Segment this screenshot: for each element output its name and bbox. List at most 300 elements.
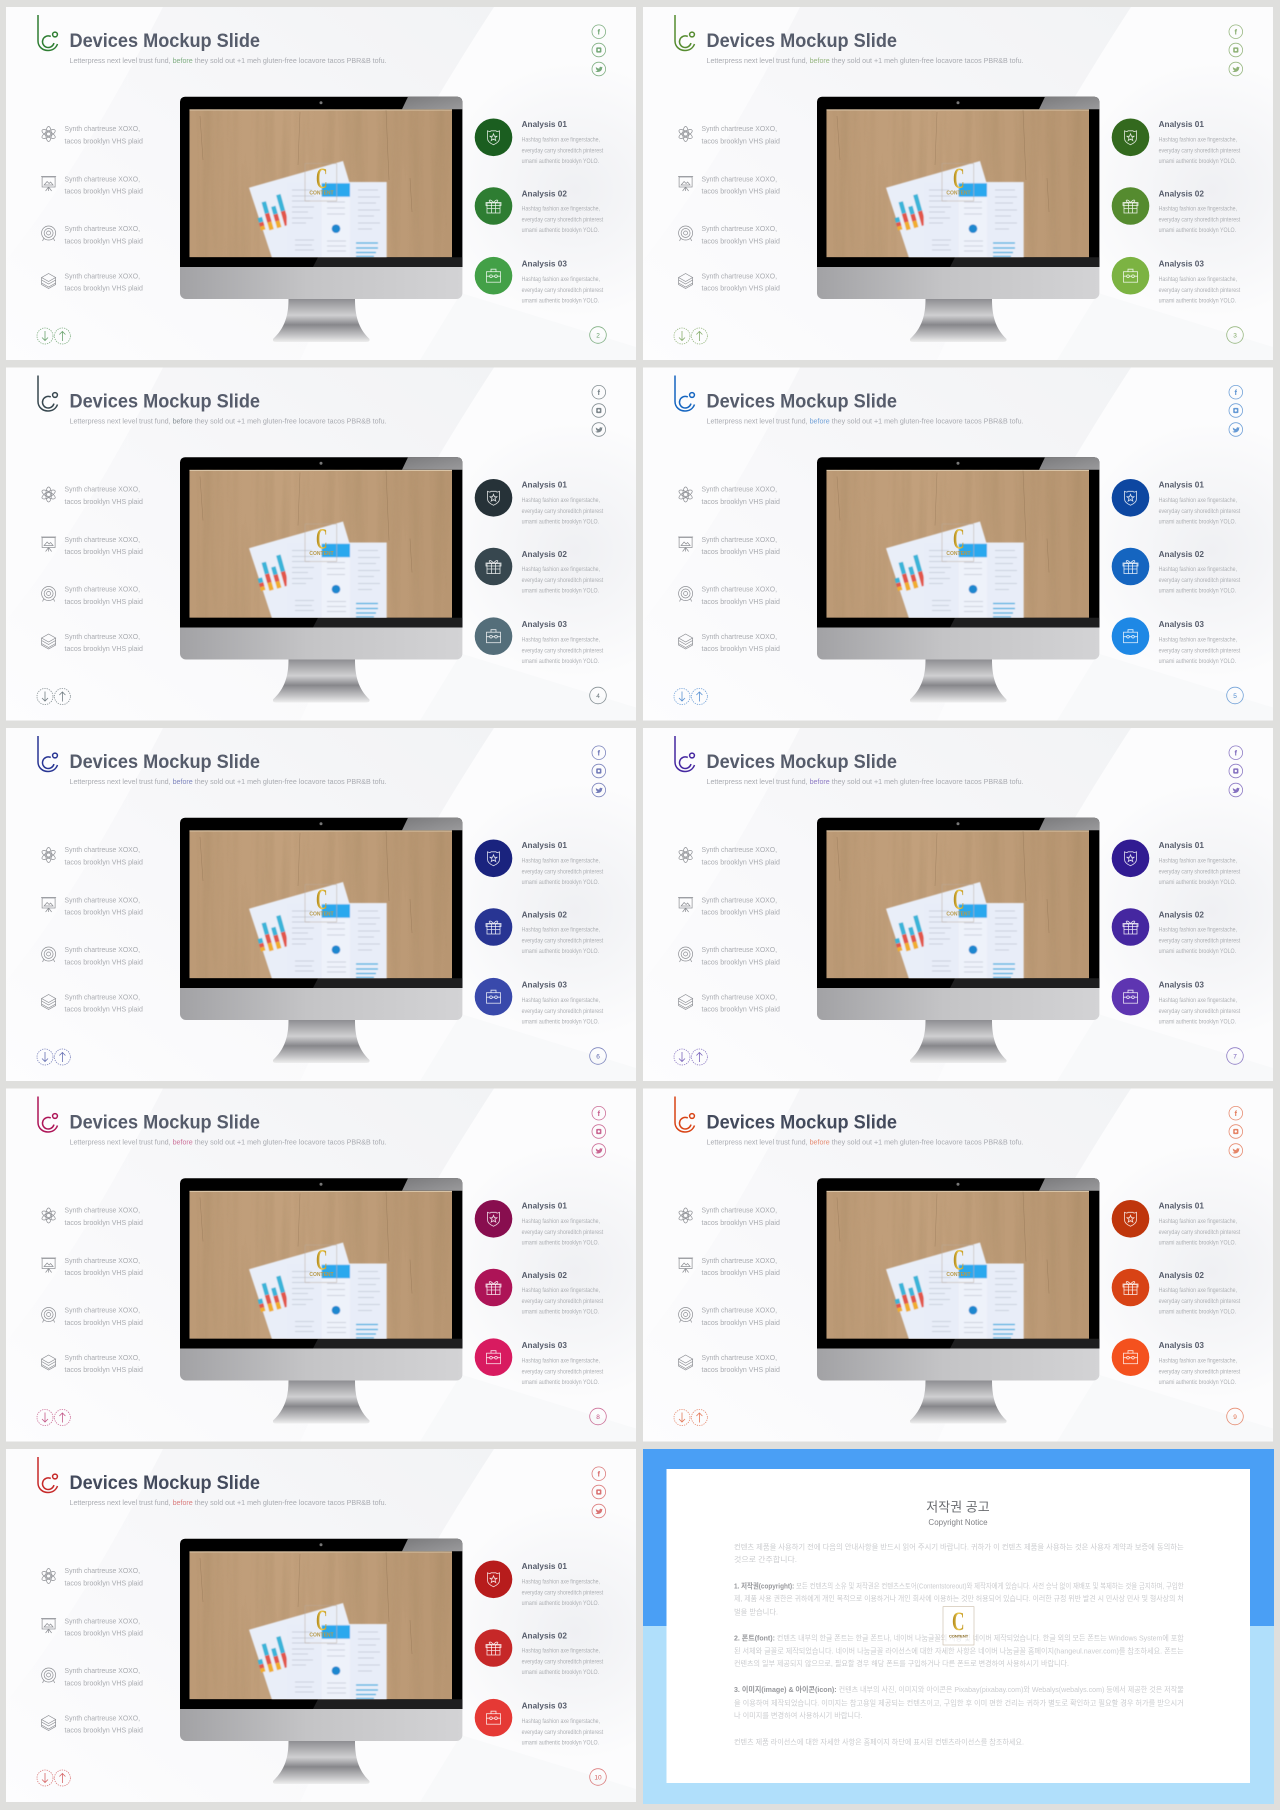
- feature list: tacos brooklyn VHS plaid: [64, 644, 143, 653]
- analysis 01: Hashtag fashion axe fingerstache,: [1159, 498, 1237, 504]
- slide 2: [6, 7, 710, 360]
- analysis 02: [475, 1629, 603, 1676]
- slide background: [6, 1088, 710, 1442]
- slide background: [643, 7, 1280, 360]
- slide 10: [6, 1449, 710, 1802]
- analysis 03: everyday carry shoreditch pinterest: [1159, 649, 1240, 655]
- title: Devices Mockup Slide: [70, 1473, 260, 1494]
- page number: [1227, 1408, 1243, 1425]
- analysis 03: umami authentic brooklyn YOLO.: [1159, 659, 1236, 665]
- feature list: Synth chartreuse XOXO,: [64, 224, 140, 233]
- monitor mockup: [817, 818, 1099, 1063]
- feature list: Synth chartreuse XOXO,: [64, 632, 140, 641]
- slide 9: [643, 1088, 1280, 1442]
- title: Devices Mockup Slide: [70, 31, 260, 52]
- analysis 02: umami authentic brooklyn YOLO.: [522, 949, 599, 955]
- feature list: Synth chartreuse XOXO,: [702, 992, 777, 1001]
- analysis 01: [1112, 118, 1240, 165]
- monitor mockup: [180, 1178, 462, 1424]
- analysis 02: umami authentic brooklyn YOLO.: [1159, 589, 1236, 595]
- title: Devices Mockup Slide: [70, 392, 260, 412]
- analysis 02: umami authentic brooklyn YOLO.: [522, 1670, 599, 1676]
- page number: 3: [1233, 332, 1237, 339]
- social icons: f: [1235, 748, 1238, 757]
- notice body text: 3. 이미지(image) & 아이콘(icon): 컨텐츠 내부의 사진, 이미지와 아이콘은 Pixabay(pixabay.com)와 Webalys(webalys.com) 등에서 제공한 것은 저작물: [734, 1685, 1184, 1694]
- subtitle: Letterpress next level trust fund, before they sold out +1 meh gluten-free locavore tacos PBR&B tofu.: [70, 777, 387, 786]
- social icons: f: [598, 1109, 601, 1118]
- analysis 03: Hashtag fashion axe fingerstache,: [522, 1719, 600, 1725]
- analysis 03: Analysis 03: [1159, 259, 1204, 269]
- analysis 01: everyday carry shoreditch pinterest: [1159, 869, 1240, 875]
- analysis 03: everyday carry shoreditch pinterest: [522, 288, 603, 294]
- feature list: [678, 1206, 780, 1374]
- analysis 02: Analysis 02: [522, 1270, 567, 1280]
- page number: 9: [1233, 1414, 1237, 1421]
- feature list: tacos brooklyn VHS plaid: [64, 1629, 143, 1638]
- analysis 01: everyday carry shoreditch pinterest: [522, 1590, 603, 1596]
- navigation arrows: [674, 1049, 707, 1065]
- analysis 03: Hashtag fashion axe fingerstache,: [1159, 998, 1237, 1004]
- feature list: tacos brooklyn VHS plaid: [702, 236, 780, 245]
- feature list: [678, 845, 780, 1014]
- analysis 02: [475, 548, 603, 595]
- feature list: Synth chartreuse XOXO,: [64, 174, 140, 183]
- notice body text: 것으로 간주합니다.: [734, 1555, 797, 1564]
- analysis 01: Analysis 01: [1159, 840, 1204, 850]
- logo: [38, 1096, 58, 1132]
- feature list: Synth chartreuse XOXO,: [64, 535, 140, 544]
- analysis 02: everyday carry shoreditch pinterest: [522, 218, 603, 224]
- analysis 01: [1112, 1200, 1240, 1246]
- feature list: Synth chartreuse XOXO,: [64, 1566, 140, 1575]
- analysis 01: [475, 1560, 603, 1607]
- feature list: [678, 484, 780, 653]
- analysis 02: [1112, 548, 1240, 595]
- analysis 02: [475, 187, 603, 234]
- slide background: [6, 728, 710, 1081]
- notice body text: 을 이용하여 제작되었습니다. 이미지는 참고용일 제공되는 컨텐츠이고, 구입한 후 이미 편한 건리는 귀하가 별도로 확인하고 필요할 경우 허가를 받으시거: [734, 1698, 1184, 1708]
- analysis 03: umami authentic brooklyn YOLO.: [1159, 1380, 1236, 1386]
- analysis 01: [475, 1200, 603, 1246]
- feature list: Synth chartreuse XOXO,: [702, 584, 777, 594]
- social icons: [1229, 746, 1243, 797]
- analysis 03: Analysis 03: [1159, 1340, 1204, 1350]
- notice body text: 벌을 받습니다.: [734, 1608, 778, 1616]
- analysis 01: Analysis 01: [1159, 1200, 1204, 1210]
- notice body text: [734, 1542, 1184, 1746]
- analysis 02: Hashtag fashion axe fingerstache,: [1159, 207, 1237, 213]
- analysis 03: umami authentic brooklyn YOLO.: [522, 1380, 599, 1386]
- feature list: Synth chartreuse XOXO,: [64, 1713, 140, 1722]
- feature list: tacos brooklyn VHS plaid: [64, 497, 143, 506]
- analysis 02: umami authentic brooklyn YOLO.: [1159, 949, 1236, 955]
- analysis 01: [475, 840, 603, 886]
- analysis 03: Analysis 03: [522, 1340, 567, 1350]
- notice body text: 2. 폰트(font): 컨텐츠 내부의 한글 폰트는 한글 폰트나, 네이버 나눔글꼴의 사용 및 네이버 제작되었습니다. 한글 외의 모든 폰트는 Windows System에 포함: [734, 1634, 1184, 1642]
- analysis 01: umami authentic brooklyn YOLO.: [1159, 519, 1236, 525]
- notice body text: 컨텐츠 제품을 사용하기 전에 다음의 안내사항을 반드시 읽어 주시기 바랍니다. 귀하가 이 컨텐츠 제품을 사용하는 것은 사용자 계약과 보증에 동의하는: [734, 1542, 1184, 1551]
- slide 6: [6, 728, 710, 1081]
- title: Devices Mockup Slide: [706, 752, 897, 773]
- feature list: Synth chartreuse XOXO,: [702, 1306, 777, 1314]
- subtitle: Letterpress next level trust fund, before they sold out +1 meh gluten-free locavore tacos PBR&B tofu.: [70, 417, 387, 426]
- feature list: Synth chartreuse XOXO,: [64, 945, 140, 954]
- analysis 01: everyday carry shoreditch pinterest: [522, 509, 603, 515]
- feature list: tacos brooklyn VHS plaid: [64, 908, 143, 917]
- page number: 8: [596, 1414, 600, 1421]
- feature list: tacos brooklyn VHS plaid: [702, 1365, 780, 1374]
- analysis 02: Hashtag fashion axe fingerstache,: [1159, 567, 1237, 573]
- analysis 02: umami authentic brooklyn YOLO.: [522, 228, 599, 234]
- analysis 03: Hashtag fashion axe fingerstache,: [522, 277, 600, 283]
- analysis 03: everyday carry shoreditch pinterest: [522, 1730, 603, 1736]
- title: Devices Mockup Slide: [70, 752, 260, 773]
- white card: [666, 1469, 1250, 1783]
- feature list: tacos brooklyn VHS plaid: [702, 136, 780, 145]
- analysis 03: umami authentic brooklyn YOLO.: [522, 659, 599, 665]
- analysis 03: [475, 617, 603, 665]
- page number: [590, 327, 606, 343]
- feature list: tacos brooklyn VHS plaid: [702, 497, 780, 506]
- analysis 01: Analysis 01: [522, 119, 567, 129]
- analysis 03: Hashtag fashion axe fingerstache,: [1159, 638, 1237, 644]
- feature list: Synth chartreuse XOXO,: [702, 1206, 777, 1214]
- feature list: [41, 124, 143, 293]
- analysis 02: umami authentic brooklyn YOLO.: [522, 589, 599, 595]
- analysis 02: Hashtag fashion axe fingerstache,: [522, 207, 600, 213]
- analysis 03: [1112, 1338, 1240, 1386]
- analysis 03: Analysis 03: [522, 619, 567, 629]
- analysis 01: umami authentic brooklyn YOLO.: [1159, 159, 1236, 165]
- feature list: Synth chartreuse XOXO,: [64, 1666, 140, 1675]
- analysis 01: umami authentic brooklyn YOLO.: [522, 159, 599, 165]
- feature list: Synth chartreuse XOXO,: [702, 632, 777, 641]
- navigation arrows: [37, 1770, 70, 1786]
- watermark logo: CONTENT: [949, 1634, 969, 1638]
- analysis 02: [1112, 1269, 1240, 1316]
- analysis 01: [1112, 840, 1240, 886]
- analysis 01: [1112, 479, 1240, 525]
- feature list: tacos brooklyn VHS plaid: [64, 1268, 143, 1277]
- social icons: [592, 746, 606, 797]
- social icons: f: [1235, 27, 1238, 36]
- monitor mockup: [817, 457, 1099, 702]
- feature list: [41, 845, 143, 1014]
- feature list: Synth chartreuse XOXO,: [64, 124, 140, 133]
- page number: 7: [1233, 1053, 1237, 1060]
- feature list: Synth chartreuse XOXO,: [64, 1616, 140, 1625]
- watermark logo: C: [952, 1607, 964, 1636]
- analysis 01: [475, 479, 603, 525]
- analysis 03: umami authentic brooklyn YOLO.: [522, 1740, 599, 1746]
- title: Devices Mockup Slide: [706, 1112, 897, 1134]
- slide 5: [643, 368, 1280, 720]
- logo: [675, 736, 694, 772]
- monitor mockup: [180, 457, 462, 702]
- analysis 03: Hashtag fashion axe fingerstache,: [1159, 1359, 1237, 1365]
- analysis 02: Analysis 02: [522, 188, 567, 198]
- analysis 01: umami authentic brooklyn YOLO.: [522, 1240, 599, 1246]
- page number: [590, 1048, 606, 1064]
- notice body text: 된 서체와 글꼴로 제작되었습니다. 네이버 나눔글꼴 라이선스에 대한 자세한 사항은 네이버 나눔글꼴 홈페이지(hangeul.naver.com)를 참조하세요. 폰트는: [734, 1646, 1184, 1656]
- analysis 02: Analysis 02: [522, 549, 567, 559]
- analysis 03: [475, 1699, 603, 1746]
- subtitle: Letterpress next level trust fund, before they sold out +1 meh gluten-free locavore tacos PBR&B tofu.: [706, 1138, 1024, 1147]
- analysis 03: umami authentic brooklyn YOLO.: [1159, 1020, 1236, 1026]
- analysis 03: [475, 1338, 603, 1386]
- feature list: tacos brooklyn VHS plaid: [702, 957, 780, 966]
- feature list: tacos brooklyn VHS plaid: [702, 1005, 780, 1014]
- page number: 4: [596, 693, 600, 700]
- analysis 02: everyday carry shoreditch pinterest: [522, 578, 603, 584]
- feature list: tacos brooklyn VHS plaid: [64, 1578, 143, 1587]
- social icons: [592, 1106, 606, 1157]
- feature list: tacos brooklyn VHS plaid: [64, 236, 143, 245]
- analysis 02: Analysis 02: [1159, 188, 1204, 198]
- page number: 6: [596, 1053, 600, 1060]
- navigation arrows: [37, 688, 70, 704]
- feature list: Synth chartreuse XOXO,: [64, 271, 140, 280]
- feature list: tacos brooklyn VHS plaid: [64, 957, 143, 966]
- notice body text: 컨텐츠의 일부 제공되지 않으므로, 필요할 경우 해당 폰트를 구입하거나 다른 폰트로 변경하여 사용하시기 바랍니다.: [734, 1659, 1069, 1668]
- blue backdrop: [643, 1449, 1274, 1804]
- logo: [38, 736, 58, 772]
- analysis 03: everyday carry shoreditch pinterest: [522, 1009, 603, 1015]
- title: Devices Mockup Slide: [70, 1112, 260, 1134]
- feature list: tacos brooklyn VHS plaid: [702, 597, 780, 606]
- feature list: tacos brooklyn VHS plaid: [702, 1268, 780, 1277]
- navigation arrows: [37, 1410, 70, 1426]
- feature list: Synth chartreuse XOXO,: [702, 535, 777, 544]
- feature list: Synth chartreuse XOXO,: [64, 992, 140, 1001]
- analysis 02: everyday carry shoreditch pinterest: [1159, 939, 1240, 945]
- monitor mockup: [180, 97, 462, 342]
- analysis 01: Analysis 01: [1159, 119, 1204, 129]
- monitor mockup: [817, 97, 1099, 342]
- feature list: tacos brooklyn VHS plaid: [64, 1365, 143, 1374]
- analysis 01: Analysis 01: [522, 1200, 567, 1210]
- analysis 03: everyday carry shoreditch pinterest: [1159, 1009, 1240, 1015]
- subtitle: Letterpress next level trust fund, before they sold out +1 meh gluten-free locavore tacos PBR&B tofu.: [70, 56, 387, 65]
- analysis 01: Hashtag fashion axe fingerstache,: [522, 1219, 600, 1225]
- copyright heading: 저작권 공고: [926, 1500, 990, 1514]
- navigation arrows: [37, 328, 70, 344]
- analysis 03: Hashtag fashion axe fingerstache,: [522, 1359, 600, 1365]
- analysis 02: everyday carry shoreditch pinterest: [522, 1660, 603, 1666]
- analysis 03: [1112, 978, 1240, 1026]
- feature list: Synth chartreuse XOXO,: [702, 845, 777, 854]
- analysis 03: everyday carry shoreditch pinterest: [522, 1370, 603, 1376]
- feature list: Synth chartreuse XOXO,: [64, 845, 140, 854]
- page number: 5: [1233, 693, 1237, 700]
- subtitle: Letterpress next level trust fund, before they sold out +1 meh gluten-free locavore tacos PBR&B tofu.: [706, 417, 1024, 426]
- page number: 10: [594, 1774, 602, 1781]
- subtitle: Letterpress next level trust fund, before they sold out +1 meh gluten-free locavore tacos PBR&B tofu.: [70, 1138, 387, 1147]
- analysis 02: Analysis 02: [522, 909, 567, 919]
- feature list: Synth chartreuse XOXO,: [702, 124, 777, 133]
- page number: [1227, 687, 1243, 704]
- analysis 02: Analysis 02: [522, 1630, 567, 1640]
- subtitle: Letterpress next level trust fund, before they sold out +1 meh gluten-free locavore tacos PBR&B tofu.: [706, 777, 1024, 786]
- analysis 01: Hashtag fashion axe fingerstache,: [522, 858, 600, 864]
- analysis 01: everyday carry shoreditch pinterest: [522, 869, 603, 875]
- watermark logo: [943, 1607, 974, 1645]
- analysis 03: everyday carry shoreditch pinterest: [1159, 1370, 1240, 1376]
- social icons: f: [598, 748, 601, 757]
- feature list: Synth chartreuse XOXO,: [64, 484, 140, 494]
- title: Devices Mockup Slide: [706, 31, 897, 52]
- analysis 01: Hashtag fashion axe fingerstache,: [522, 498, 600, 504]
- analysis 03: Hashtag fashion axe fingerstache,: [1159, 277, 1237, 283]
- slide background: [6, 7, 710, 360]
- feature list: Synth chartreuse XOXO,: [64, 1206, 140, 1214]
- social icons: f: [1235, 1109, 1238, 1118]
- social icons: [592, 385, 606, 436]
- analysis 03: [1112, 617, 1240, 665]
- slide 3: [643, 7, 1280, 360]
- logo: [38, 15, 58, 50]
- analysis 03: everyday carry shoreditch pinterest: [1159, 288, 1240, 294]
- analysis 02: Analysis 02: [1159, 1270, 1204, 1280]
- feature list: [41, 1206, 143, 1374]
- slide 8: [6, 1088, 710, 1442]
- analysis 02: Hashtag fashion axe fingerstache,: [1159, 1288, 1237, 1294]
- analysis 03: umami authentic brooklyn YOLO.: [522, 298, 599, 304]
- feature list: Synth chartreuse XOXO,: [702, 895, 777, 904]
- analysis 02: [1112, 187, 1240, 234]
- feature list: [678, 124, 780, 293]
- analysis 02: everyday carry shoreditch pinterest: [522, 1299, 603, 1305]
- analysis 01: Hashtag fashion axe fingerstache,: [1159, 858, 1237, 864]
- notice body text: 제, 제품 사용 권한은 귀하에게 개인 목적으로 이용하거나 개인 회사에 이용하는 것만 허용되어 있습니다. 이러한 규정 위반 발견 시 민사상 민사 및 형사상의 처: [734, 1594, 1184, 1603]
- feature list: tacos brooklyn VHS plaid: [702, 1318, 780, 1327]
- analysis 02: everyday carry shoreditch pinterest: [1159, 218, 1240, 224]
- analysis 01: umami authentic brooklyn YOLO.: [1159, 1240, 1236, 1246]
- monitor mockup: [180, 1539, 462, 1784]
- social icons: f: [598, 1469, 601, 1478]
- analysis 02: Hashtag fashion axe fingerstache,: [522, 928, 600, 934]
- navigation arrows: [674, 1410, 707, 1426]
- analysis 01: umami authentic brooklyn YOLO.: [522, 519, 599, 525]
- analysis 02: everyday carry shoreditch pinterest: [522, 939, 603, 945]
- feature list: tacos brooklyn VHS plaid: [64, 857, 143, 866]
- feature list: Synth chartreuse XOXO,: [702, 271, 777, 280]
- analysis 02: everyday carry shoreditch pinterest: [1159, 578, 1240, 584]
- feature list: Synth chartreuse XOXO,: [64, 1306, 140, 1314]
- copyright subheading: Copyright Notice: [928, 1518, 988, 1527]
- subtitle: Letterpress next level trust fund, before they sold out +1 meh gluten-free locavore tacos PBR&B tofu.: [70, 1498, 387, 1507]
- analysis 01: everyday carry shoreditch pinterest: [522, 1230, 603, 1236]
- feature list: tacos brooklyn VHS plaid: [64, 1218, 143, 1227]
- page number: [590, 1408, 606, 1425]
- analysis 01: Hashtag fashion axe fingerstache,: [1159, 137, 1237, 143]
- social icons: f: [598, 388, 601, 397]
- slide 4: [6, 368, 710, 720]
- social icons: [592, 25, 606, 76]
- social icons: [592, 1467, 606, 1518]
- feature list: Synth chartreuse XOXO,: [702, 224, 777, 233]
- slide background: [6, 1449, 710, 1802]
- feature list: Synth chartreuse XOXO,: [702, 945, 777, 954]
- navigation arrows: [37, 1049, 70, 1065]
- page number: [590, 687, 606, 704]
- analysis 02: umami authentic brooklyn YOLO.: [1159, 1310, 1236, 1316]
- analysis 01: Analysis 01: [522, 1561, 567, 1571]
- navigation arrows: [674, 688, 707, 704]
- feature list: Synth chartreuse XOXO,: [64, 1353, 140, 1362]
- slide background: [643, 1088, 1280, 1442]
- analysis 03: Analysis 03: [522, 1701, 567, 1711]
- feature list: tacos brooklyn VHS plaid: [702, 187, 780, 196]
- feature list: tacos brooklyn VHS plaid: [702, 857, 780, 866]
- analysis 03: Hashtag fashion axe fingerstache,: [522, 638, 600, 644]
- monitor mockup: [817, 1178, 1099, 1424]
- slide 7: [643, 728, 1280, 1081]
- social icons: [1229, 1106, 1243, 1157]
- analysis 02: umami authentic brooklyn YOLO.: [522, 1310, 599, 1316]
- analysis 03: Analysis 03: [1159, 980, 1204, 990]
- analysis 01: umami authentic brooklyn YOLO.: [1159, 880, 1236, 886]
- page number: 2: [596, 332, 600, 339]
- analysis 03: umami authentic brooklyn YOLO.: [522, 1020, 599, 1026]
- subtitle: Letterpress next level trust fund, before they sold out +1 meh gluten-free locavore tacos PBR&B tofu.: [706, 56, 1024, 65]
- feature list: [41, 1566, 143, 1735]
- social icons: [1229, 385, 1243, 436]
- feature list: Synth chartreuse XOXO,: [702, 174, 777, 183]
- analysis 01: Hashtag fashion axe fingerstache,: [522, 1579, 600, 1585]
- analysis 03: umami authentic brooklyn YOLO.: [1159, 298, 1236, 304]
- analysis 01: umami authentic brooklyn YOLO.: [522, 1601, 599, 1607]
- analysis 02: [1112, 908, 1240, 955]
- feature list: [41, 484, 143, 653]
- page number: [590, 1769, 606, 1785]
- logo: [675, 15, 694, 50]
- analysis 02: Hashtag fashion axe fingerstache,: [1159, 928, 1237, 934]
- feature list: tacos brooklyn VHS plaid: [64, 597, 143, 606]
- slide background: [6, 368, 710, 720]
- feature list: Synth chartreuse XOXO,: [702, 1353, 777, 1362]
- analysis 01: everyday carry shoreditch pinterest: [522, 148, 603, 154]
- panel: copyright notice: [643, 1449, 1274, 1804]
- monitor mockup: [180, 818, 462, 1063]
- analysis 01: Analysis 01: [522, 480, 567, 490]
- notice body text: 1. 저작권(copyright): 모든 컨텐츠의 소유 및 저작권은 컨텐츠스토어(Contentstoreout)와 제작자에게 있습니다. 사전 승낙 없이 재배포 및 복제하는 것을 금지하며, 구입한: [734, 1582, 1184, 1590]
- analysis 02: [475, 1269, 603, 1316]
- analysis 03: Analysis 03: [1159, 619, 1204, 629]
- notice body text: 나 이미지를 변경하여 사용하시기 바랍니다.: [734, 1711, 863, 1720]
- feature list: Synth chartreuse XOXO,: [64, 584, 140, 594]
- analysis 02: Hashtag fashion axe fingerstache,: [522, 1649, 600, 1655]
- page number: [1227, 327, 1243, 343]
- analysis 02: everyday carry shoreditch pinterest: [1159, 1299, 1240, 1305]
- logo: [38, 1457, 58, 1492]
- feature list: tacos brooklyn VHS plaid: [702, 1218, 780, 1227]
- analysis 02: Hashtag fashion axe fingerstache,: [522, 1288, 600, 1294]
- logo: [675, 376, 694, 411]
- analysis 03: Analysis 03: [522, 980, 567, 990]
- analysis 03: [475, 257, 603, 304]
- analysis 01: [475, 118, 603, 165]
- analysis 01: Hashtag fashion axe fingerstache,: [1159, 1219, 1237, 1225]
- analysis 02: Analysis 02: [1159, 549, 1204, 559]
- analysis 01: Hashtag fashion axe fingerstache,: [522, 137, 600, 143]
- analysis 03: Analysis 03: [522, 259, 567, 269]
- social icons: f: [1235, 388, 1238, 397]
- feature list: Synth chartreuse XOXO,: [64, 895, 140, 904]
- title: Devices Mockup Slide: [706, 392, 897, 412]
- analysis 01: everyday carry shoreditch pinterest: [1159, 509, 1240, 515]
- feature list: tacos brooklyn VHS plaid: [64, 1005, 143, 1014]
